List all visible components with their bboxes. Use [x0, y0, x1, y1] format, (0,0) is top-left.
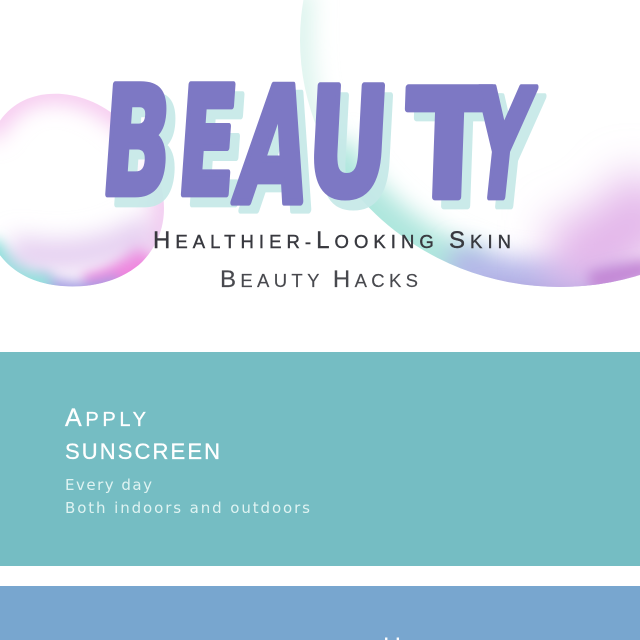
title shadow: E [182, 65, 252, 240]
bubble: small left [0, 94, 164, 286]
title letters: B [96, 56, 177, 230]
panel body text: Every day [65, 476, 152, 494]
title shadow [105, 62, 548, 248]
title shadow: U [311, 67, 401, 241]
panel: apply sunscreen [0, 352, 640, 566]
title shadow: Y [471, 69, 548, 242]
panel heading: SUNSCREEN [65, 439, 220, 464]
panel: next tip [0, 586, 640, 640]
title letters: T [403, 58, 494, 233]
title shadow: T [412, 67, 503, 242]
bubble: large top right [290, 0, 640, 300]
title letters: A [227, 54, 322, 240]
title: BEAUTY [96, 54, 548, 248]
title letters: E [173, 55, 243, 230]
panel heading [65, 404, 220, 464]
panel body text: Both indoors and outdoors [65, 499, 310, 517]
title shadow: B [105, 66, 186, 240]
subtitle: Beauty Hacks: BEAUTY HACKS [220, 266, 418, 293]
panel heading: APPLY [65, 404, 146, 432]
panel body text [65, 476, 310, 517]
subtitle: Healthier-Looking Skin: H EALTHIER-L OOKING S KIN [153, 227, 511, 254]
title letters: U [303, 57, 393, 231]
title shadow: A [235, 62, 330, 248]
title letters [96, 54, 540, 240]
title letters: Y [463, 60, 540, 233]
